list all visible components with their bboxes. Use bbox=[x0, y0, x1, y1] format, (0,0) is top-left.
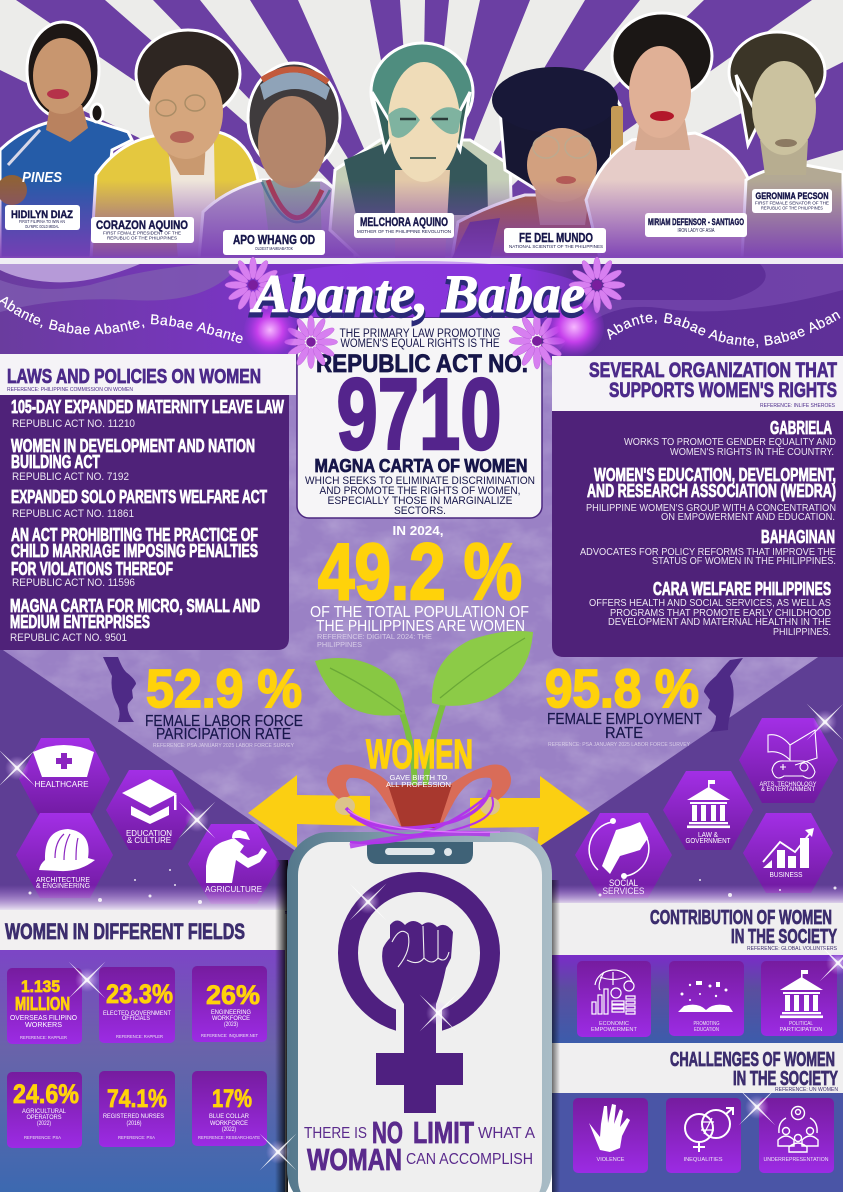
label: Hidilyn Diaz: OLYMPIC GOLD MEDAL bbox=[25, 224, 59, 229]
card: economic empowerment bbox=[577, 961, 651, 1037]
laws list: 105-DAY EXPANDED MATERNITY LEAVE LAW bbox=[11, 397, 284, 417]
card: engineering workforce: WORKFORCE bbox=[212, 1015, 251, 1022]
statistic: labor force participation: FEMALE LABOR FORCE bbox=[145, 713, 303, 730]
card: political participation bbox=[761, 961, 837, 1036]
label: Fe del Mundo: FE DEL MUNDO bbox=[519, 230, 593, 245]
laws list: AN ACT PROHIBITING THE PRACTICE OF bbox=[11, 525, 258, 545]
heading: Magna Carta of Women: MAGNA CARTA OF WOMEN bbox=[314, 455, 528, 476]
card: registered nurses: REGISTERED NURSES bbox=[103, 1113, 165, 1120]
glowing particle strip bbox=[0, 869, 843, 911]
statistic: employment rate: 95.8 % bbox=[545, 659, 699, 719]
card: agricultural operators: 24.6% bbox=[13, 1079, 79, 1109]
card: promoting education: PROMOTING bbox=[694, 1021, 720, 1027]
card: promoting education bbox=[669, 961, 744, 1036]
statistic: employment rate: RATE bbox=[605, 725, 643, 742]
organizations list: ON EMPOWERMENT AND EDUCATION. bbox=[661, 512, 835, 523]
repeating curved text: right: Abante, Babae Abante, Babae Aban bbox=[607, 312, 840, 348]
organizations list: WOMEN'S RIGHTS IN THE COUNTRY. bbox=[670, 447, 834, 458]
card: registered nurses: 74.1% bbox=[107, 1085, 167, 1113]
label: Melchora Aquino: MOTHER OF THE PHILIPPINE REVOLUTION bbox=[357, 229, 451, 234]
sparkles bbox=[0, 685, 843, 1189]
card: engineering workforce bbox=[192, 966, 267, 1042]
card: underrepresentation: UNDERREPRESENTATION bbox=[764, 1157, 829, 1163]
slogan: LIMIT bbox=[413, 1115, 474, 1150]
fields heading: WOMEN IN DIFFERENT FIELDS bbox=[5, 919, 245, 944]
card: blue collar workforce: BLUE COLLAR bbox=[209, 1113, 249, 1120]
panel: contribution of women bbox=[552, 903, 843, 1043]
card: registered nurses bbox=[99, 1071, 175, 1147]
laws list: REPUBLIC ACT NO. 11596 bbox=[12, 577, 135, 589]
phone body bbox=[287, 832, 552, 1192]
statistic: employment rate: FEMALE EMPLOYMENT bbox=[547, 711, 702, 728]
statistic: 49.2% of population: THE PHILIPPINES ARE WOMEN bbox=[316, 618, 525, 635]
laws list: BUILDING ACT bbox=[11, 452, 100, 472]
heading: Women gave birth to all profession: WOMEN bbox=[366, 731, 473, 777]
card: overseas Filipino workers: REFERENCE: RAPPLER bbox=[20, 1035, 68, 1040]
statistic: labor force participation: PARICIPATION RATE bbox=[156, 726, 291, 743]
main lilac background bbox=[0, 264, 843, 914]
statistic: employment rate bbox=[545, 659, 702, 748]
laws heading: LAWS AND POLICIES ON WOMEN bbox=[7, 365, 261, 388]
card: promoting education: EDUCATION bbox=[694, 1027, 719, 1033]
statistic: labor force participation: REFERENCE: PSA JANUARY 2025 LABOR FORCE SURVEY bbox=[153, 743, 294, 749]
slogan: WOMAN bbox=[307, 1142, 402, 1177]
laws list: WOMEN IN DEVELOPMENT AND NATION bbox=[11, 436, 255, 456]
label: Corazon Aquino: CORAZON AQUINO bbox=[96, 218, 188, 232]
laws list: REPUBLIC ACT NO. 11861 bbox=[12, 508, 134, 520]
panel: Republic Act 9710 bbox=[297, 318, 542, 518]
label: Geronima Pecson: REPUBLIC OF THE PHILIPPINES bbox=[761, 206, 823, 210]
hexagon: law and government: GOVERNMENT bbox=[686, 836, 731, 845]
white divider bbox=[0, 258, 843, 264]
arrow: left yellow bbox=[248, 775, 370, 848]
laws list: CHILD MARRIAGE IMPOSING PENALTIES bbox=[11, 541, 258, 561]
description: AND PROMOTE THE RIGHTS OF WOMEN, bbox=[320, 485, 520, 497]
statistic: 49.2% of population: IN 2024, bbox=[392, 523, 444, 538]
card: blue collar workforce: 17% bbox=[212, 1085, 252, 1113]
statistic: labor force participation: 52.9 % bbox=[146, 659, 302, 719]
card: agricultural operators: (2022) bbox=[37, 1121, 51, 1127]
hexagon: education and culture bbox=[106, 770, 195, 850]
phone side shadows bbox=[275, 860, 560, 1192]
label: Hidilyn Diaz: FIRST FILIPINA TO WIN AN bbox=[19, 219, 65, 224]
card: elected government officials: ELECTED GOVERNMENT bbox=[103, 1010, 171, 1017]
laws list: MEDIUM ENTERPRISES bbox=[10, 612, 150, 632]
intro text: WOMEN'S EQUAL RIGHTS IS THE bbox=[340, 338, 500, 350]
hexagon: education and culture: EDUCATION bbox=[126, 828, 172, 838]
card: overseas Filipino workers: WORKERS bbox=[25, 1020, 62, 1029]
organizations list: OFFERS HEALTH AND SOCIAL SERVICES, AS WELL AS bbox=[589, 598, 831, 609]
icon: female symbol with raised fist bbox=[348, 882, 490, 1113]
label: Hidilyn Diaz: HIDILYN DIAZ bbox=[11, 209, 73, 221]
intro text: THE PRIMARY LAW PROMOTING bbox=[340, 328, 501, 340]
top banner background with rays bbox=[0, 0, 843, 275]
label: Melchora Aquino bbox=[354, 213, 454, 238]
hexagon: social services bbox=[575, 813, 672, 898]
heading: Women gave birth to all profession: GAVE BIRTH TO bbox=[390, 773, 448, 782]
card: agricultural operators: REFERENCE: PSA bbox=[24, 1135, 61, 1140]
challenges heading bbox=[552, 1043, 843, 1093]
card: overseas Filipino workers: 1.135 bbox=[21, 977, 60, 996]
organizations list bbox=[552, 411, 843, 657]
title: Abante, Babae: Abante, Babae bbox=[250, 264, 585, 324]
slogan bbox=[304, 1115, 535, 1177]
card: inequalities bbox=[666, 1098, 741, 1173]
fields heading bbox=[0, 910, 285, 950]
card: inequalities: INEQUALITIES bbox=[684, 1157, 723, 1163]
hexagon: arts, technology and entertainment bbox=[739, 718, 838, 803]
panel: challenges of women bbox=[552, 1043, 843, 1192]
card: violence bbox=[573, 1098, 648, 1173]
statistic: 49.2% of population: REFERENCE: DIGITAL 2024: THE bbox=[317, 634, 432, 641]
card: overseas Filipino workers: OVERSEAS FILIPINO bbox=[10, 1013, 77, 1022]
slogan: NO bbox=[372, 1115, 403, 1150]
card: overseas Filipino workers: MILLION bbox=[15, 994, 70, 1014]
label: Miriam Defensor-Santiago: IRON LADY OF ASIA bbox=[678, 228, 715, 234]
hexagon: architecture and engineering: & ENGINEERING bbox=[36, 881, 90, 890]
statistic: labor force participation bbox=[145, 659, 303, 749]
label: Geronima Pecson bbox=[752, 189, 832, 213]
card: agricultural operators bbox=[7, 1072, 82, 1148]
hexagon: law and government: LAW & bbox=[698, 830, 718, 839]
hexagon: healthcare: HEALTHCARE bbox=[34, 779, 89, 789]
big number 9710: 9710 bbox=[336, 359, 502, 471]
card: elected government officials bbox=[99, 967, 175, 1043]
challenges heading: REFERENCE: UN WOMEN bbox=[775, 1087, 838, 1093]
hexagon: agriculture bbox=[188, 824, 280, 904]
portrait: Fe del Mundo bbox=[452, 67, 645, 258]
statistic: 49.2% of population: OF THE TOTAL POPULATION OF bbox=[310, 604, 529, 621]
hexagon: business: BUSINESS bbox=[770, 870, 802, 879]
intro text bbox=[340, 328, 501, 350]
header band bbox=[0, 261, 843, 360]
label: Apo Whang Od: APO WHANG OD bbox=[233, 232, 315, 247]
slogan: CAN ACCOMPLISH bbox=[406, 1151, 533, 1168]
dark lower triangles bbox=[0, 640, 843, 912]
purple swirl bbox=[346, 790, 500, 846]
portrait: Hidilyn Diaz bbox=[0, 22, 132, 258]
card: agricultural operators: AGRICULTURAL bbox=[22, 1108, 66, 1115]
laws list: REPUBLIC ACT NO. 9501 bbox=[10, 632, 127, 644]
label: Apo Whang Od bbox=[223, 230, 325, 255]
description bbox=[305, 475, 535, 517]
card: elected government officials: OFFICIALS bbox=[122, 1015, 151, 1022]
organizations list: DEVELOPMENT AND MATERNAL HEALTHN IN THE bbox=[608, 617, 831, 628]
organizations heading: REFERENCE: INLIFE SHEROES bbox=[760, 403, 836, 409]
label: Corazon Aquino: FIRST FEMALE PRESIDENT OF THE bbox=[103, 230, 181, 236]
portrait: Hidilyn Diaz: PINES bbox=[22, 169, 62, 186]
label: Hidilyn Diaz bbox=[5, 205, 80, 230]
portrait: Melchora Aquino bbox=[330, 43, 512, 258]
card: elected government officials: 23.3% bbox=[106, 979, 173, 1009]
hexagon: business bbox=[743, 813, 833, 893]
silhouette: right face bbox=[704, 658, 743, 732]
phone notch bbox=[367, 842, 473, 864]
label: Miriam Defensor-Santiago bbox=[645, 213, 747, 237]
label: Geronima Pecson: FIRST FEMALE SENATOR OF THE bbox=[755, 200, 829, 206]
portrait: Miriam Defensor-Santiago bbox=[586, 13, 774, 258]
label: Fe del Mundo bbox=[504, 228, 606, 253]
description: WHICH SEEKS TO ELIMINATE DISCRIMINATION bbox=[305, 475, 535, 487]
laws list: EXPANDED SOLO PARENTS WELFARE ACT bbox=[11, 487, 267, 507]
panel: laws and policies bbox=[0, 354, 296, 650]
card: engineering workforce: 26% bbox=[206, 980, 260, 1010]
repeating curved text: left: Abante, Babae Abante, Babae Abante bbox=[0, 296, 243, 344]
flowers around the title bbox=[225, 257, 625, 369]
card: violence: VIOLENCE bbox=[596, 1157, 625, 1163]
card: engineering workforce: REFERENCE: INQUIRER.NET bbox=[201, 1033, 258, 1038]
hexagon: arts, technology and entertainment: ARTS, TECHNOLOGY bbox=[760, 782, 816, 788]
card: underrepresentation bbox=[759, 1098, 834, 1173]
statistic: 49.2% of population: 49.2 % bbox=[318, 527, 522, 616]
hexagon: architecture and engineering bbox=[16, 813, 113, 898]
card: blue collar workforce: (2022) bbox=[222, 1127, 236, 1133]
hexagon: social services: SOCIAL bbox=[609, 878, 638, 888]
label: Corazon Aquino: REPUBLIC OF THE PHILIPPINES bbox=[107, 236, 177, 240]
card: blue collar workforce: WORKFORCE bbox=[210, 1120, 249, 1127]
laws list: FOR VIOLATIONS THEREOF bbox=[11, 559, 173, 579]
laws list: MAGNA CARTA FOR MICRO, SMALL AND bbox=[10, 596, 260, 616]
organizations list: PHILIPPINES. bbox=[773, 627, 831, 638]
card: registered nurses: (2016) bbox=[126, 1121, 142, 1127]
card: overseas Filipino workers bbox=[7, 968, 82, 1044]
card: engineering workforce: (2023) bbox=[224, 1022, 238, 1028]
label: Melchora Aquino: MELCHORA AQUINO bbox=[360, 215, 448, 229]
statistic: employment rate: REFERENCE: PSA JANUARY 2025 LABOR FORCE SURVEY bbox=[548, 742, 690, 748]
portrait: Geronima Pecson bbox=[729, 32, 843, 258]
silhouette: left face bbox=[103, 657, 136, 722]
description: ESPECIALLY THOSE IN MARGINALIZE bbox=[328, 495, 512, 507]
statistic: 49.2% of population: PHILIPPINES bbox=[317, 642, 362, 649]
hexagon: architecture and engineering: ARCHITECTURE bbox=[36, 875, 90, 884]
panel: women's organizations bbox=[552, 356, 843, 657]
label: Miriam Defensor-Santiago: MIRIAM DEFENSOR - SANTIAGO bbox=[648, 217, 744, 228]
laws heading bbox=[0, 354, 296, 395]
label: Fe del Mundo: NATIONAL SCIENTIST OF THE PHILIPPINES bbox=[509, 244, 603, 249]
hexagon: arts, technology and entertainment: & ENTERTAINMENT bbox=[761, 787, 815, 793]
laws list: REPUBLIC ACT NO. 7192 bbox=[12, 471, 129, 483]
card: political participation: PARTICIPATION bbox=[780, 1027, 823, 1033]
card: blue collar workforce: REFERENCE: RESEARCHGATE bbox=[198, 1135, 260, 1140]
card: economic empowerment: EMPOWERMENT bbox=[591, 1027, 638, 1033]
uterus illustration bbox=[327, 765, 511, 828]
organizations list: PROGRAMS THAT PROMOTE EARLY CHILDHOOD bbox=[610, 608, 831, 619]
card: economic empowerment: ECONOMIC bbox=[599, 1021, 629, 1027]
hexagon: social services: SERVICES bbox=[602, 886, 644, 896]
portrait: Corazon Aquino bbox=[91, 30, 258, 258]
card: elected government officials: REFERENCE: RAPPLER bbox=[116, 1034, 164, 1039]
organizations heading bbox=[552, 356, 843, 411]
card: registered nurses: REFERENCE: PSA bbox=[118, 1135, 155, 1140]
card: engineering workforce: ENGINEERING bbox=[211, 1009, 251, 1016]
hexagon: agriculture: AGRICULTURE bbox=[205, 885, 262, 894]
card: agricultural operators: OPERATORS bbox=[26, 1114, 62, 1121]
contribution heading bbox=[552, 903, 843, 955]
slogan: WHAT A bbox=[478, 1125, 535, 1142]
laws heading: REFERENCE: PHILIPPINE COMMISSION ON WOMEN bbox=[7, 387, 133, 393]
title: Abante, Babae: Abante, Babae bbox=[250, 268, 585, 328]
hexagon: education and culture: & CULTURE bbox=[127, 835, 171, 845]
label: Corazon Aquino bbox=[91, 217, 194, 243]
portraits of Filipino women bbox=[0, 13, 843, 258]
laws list: REPUBLIC ACT NO. 11210 bbox=[12, 418, 135, 430]
plant: green sprout bbox=[315, 631, 533, 805]
card: blue collar workforce bbox=[192, 1071, 267, 1146]
heading: Republic Act No.: REPUBLIC ACT NO. bbox=[316, 350, 528, 378]
hexagon: healthcare bbox=[19, 738, 110, 820]
laws list bbox=[0, 395, 289, 650]
description: SECTORS. bbox=[394, 505, 446, 517]
slogan: THERE IS bbox=[304, 1125, 367, 1142]
arrow: right yellow bbox=[470, 776, 590, 848]
portrait: Apo Whang Od bbox=[199, 63, 355, 258]
label: Apo Whang Od: OLDEST MAMBABATOK bbox=[255, 246, 293, 251]
contribution heading: REFERENCE: GLOBAL VOLUNTEERS bbox=[747, 946, 838, 952]
panel: women in different fields bbox=[0, 910, 285, 1192]
statistic: 49.2% of population bbox=[310, 523, 529, 649]
heading: Women gave birth to all profession: ALL PROFESSION bbox=[386, 780, 451, 789]
heading: Women gave birth to all profession bbox=[366, 731, 473, 789]
hexagon: law and government bbox=[663, 771, 753, 850]
card: political participation: POLITICAL bbox=[789, 1021, 813, 1027]
